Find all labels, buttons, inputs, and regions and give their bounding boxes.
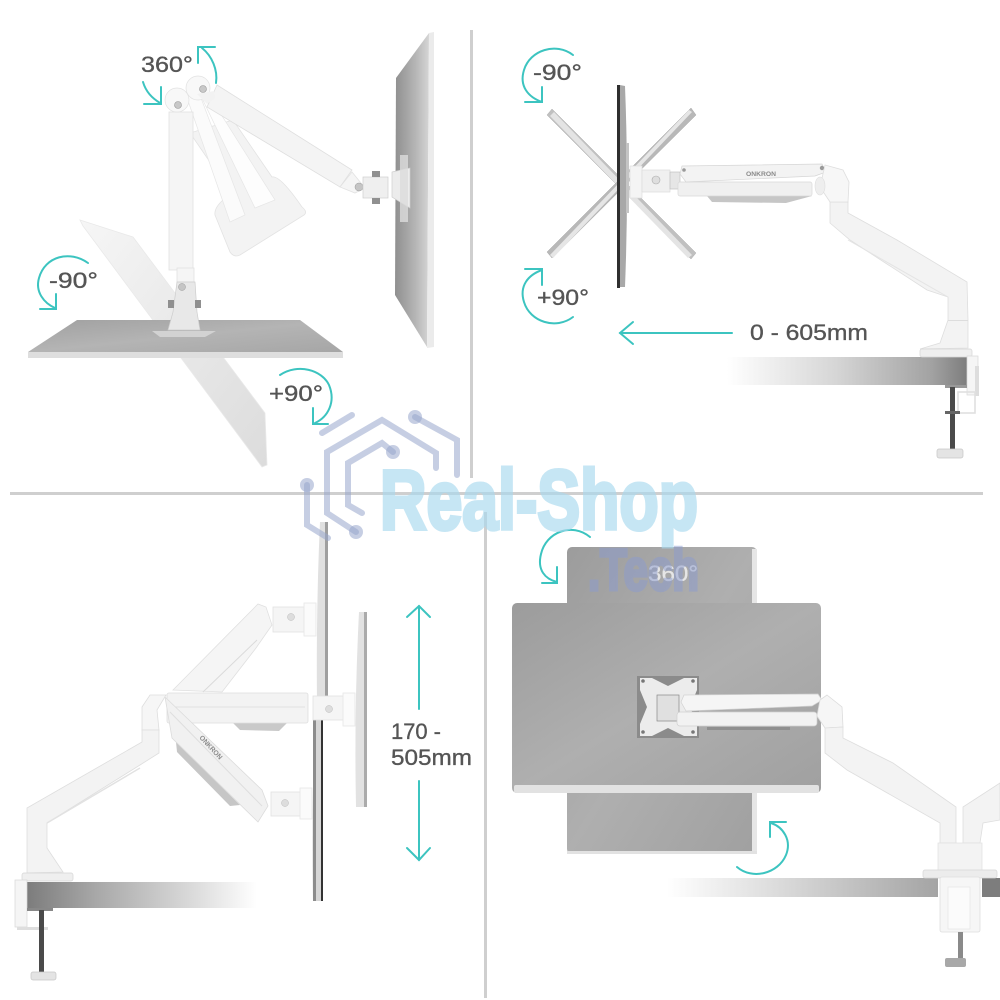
monitor: tilted down, light	[80, 220, 267, 467]
panel: swivel and extension (top right)	[523, 49, 979, 458]
desk surface	[27, 882, 257, 908]
arm: middle forearm	[167, 693, 308, 731]
bracket: joint on flat monitor	[152, 268, 216, 337]
arrow: rotate counter	[540, 530, 590, 583]
arrow: 360 clockwise up	[198, 47, 216, 83]
logo: onkron rotated: ONKRON	[198, 735, 223, 761]
arm: elbow and main arm	[817, 695, 956, 843]
arm: lower vertical segment	[165, 88, 193, 270]
label: height range: 505mm	[391, 745, 472, 770]
label: 360 degrees: 360°	[141, 52, 193, 77]
label: height range: 170 -	[391, 719, 441, 744]
desk surface	[667, 878, 1000, 897]
arrow: minus 90 tilt	[38, 256, 88, 309]
bracket: raised	[273, 603, 316, 636]
panel: tilt and rotate (top left)	[28, 32, 434, 467]
arrow: rotate up	[737, 822, 788, 874]
bracket: tilt joint on right monitor	[340, 155, 410, 222]
arm: upper tilted segment	[186, 76, 352, 187]
watermark text: Real-Shop	[380, 453, 698, 547]
label: height range	[391, 719, 472, 770]
arm: folded gas spring block	[186, 90, 306, 256]
monitor: landscape back	[512, 603, 821, 793]
arrow: plus 90 tilt	[280, 369, 332, 424]
desk clamp	[15, 873, 73, 980]
desk clamp	[923, 843, 997, 967]
monitor: flat	[28, 320, 343, 358]
arm: second arm	[963, 783, 1000, 843]
monitor: side view centre	[617, 85, 629, 288]
label: extension range: 0 - 605mm	[750, 320, 868, 345]
VESA plate	[637, 676, 699, 738]
monitors: swivel X positions	[547, 108, 696, 259]
label: minus 90: -90°	[49, 268, 98, 293]
arrow: plus 90 swivel	[523, 269, 573, 323]
monitor: lowered	[312, 707, 323, 901]
desk clamp	[920, 349, 979, 458]
label: plus 90 swivel: +90°	[537, 285, 589, 310]
bracket: middle	[313, 693, 355, 726]
bracket: lowered	[271, 788, 312, 819]
arrow: height down	[407, 781, 430, 860]
watermark logo	[300, 410, 457, 539]
panel: height adjustment (bottom left)	[15, 522, 472, 980]
monitor: raised	[317, 522, 328, 703]
label: 360 rotation: 360°	[648, 561, 698, 586]
arm: elbow and main arm	[27, 695, 166, 873]
monitor: middle	[355, 612, 367, 807]
monitor: tilted right, side	[395, 32, 434, 348]
arm: elbow and main arm	[815, 165, 968, 349]
watermark subtext: .Tech	[588, 538, 699, 603]
label: minus 90 swivel: -90°	[533, 60, 582, 85]
monitor: portrait back	[567, 547, 757, 854]
arrow: extension	[620, 322, 732, 344]
panel: 360 rotation (bottom right)	[512, 530, 1000, 967]
logo: onkron: ONKRON	[746, 171, 776, 178]
arm: lowered forearm	[165, 697, 268, 822]
arrow: minus 90 swivel	[523, 49, 573, 102]
arm: gas spring forearm	[678, 164, 826, 203]
desk surface	[727, 357, 968, 385]
arrow: 360 down	[143, 82, 161, 104]
watermark: real-shop	[300, 410, 699, 603]
arm: raised forearm	[173, 604, 272, 692]
bracket: monitor joint	[630, 166, 680, 198]
arrow: height up	[407, 606, 430, 709]
arm: gas spring forearm	[677, 694, 822, 730]
label: plus 90: +90°	[269, 381, 323, 406]
